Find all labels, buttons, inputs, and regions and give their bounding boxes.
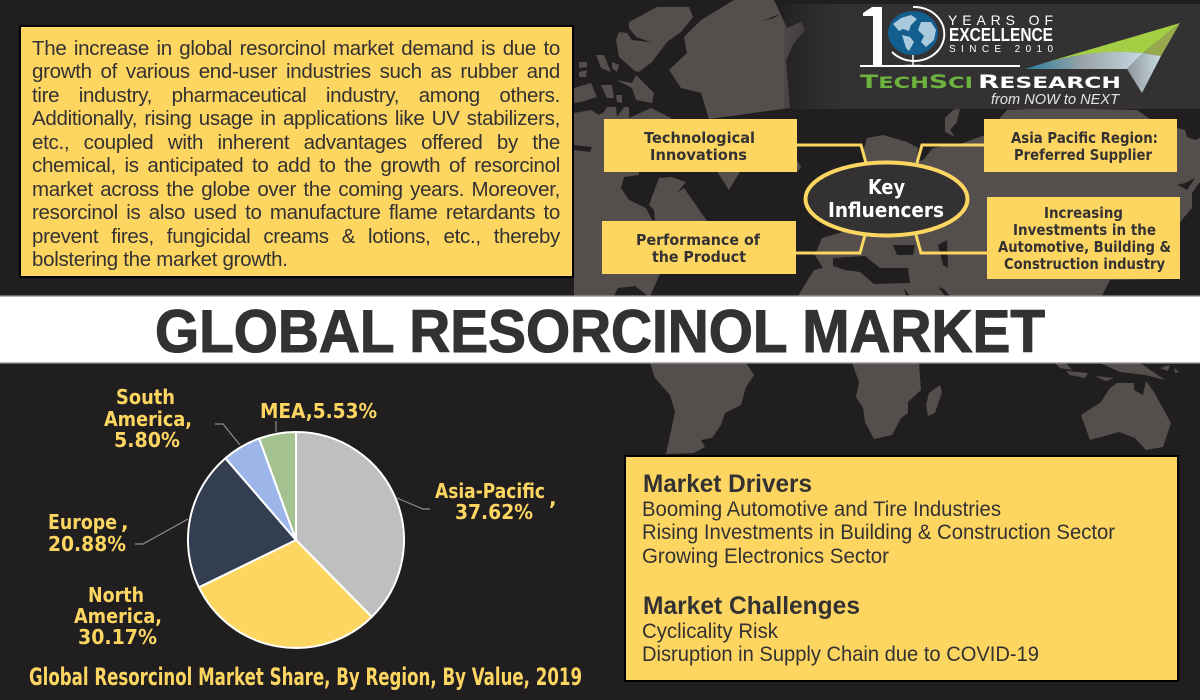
box: Increasing Investments: Investments in the xyxy=(1013,221,1156,239)
pie chart xyxy=(188,432,404,648)
market drivers list: Growing Electronics Sector xyxy=(642,545,889,568)
key influencers ellipse: Key xyxy=(868,175,905,199)
label: South America xyxy=(104,385,192,452)
panel: introduction text: market across the globe over the coming years. Moreover, xyxy=(32,178,560,200)
label: North America xyxy=(74,583,162,649)
box: Performance of the Product: the Product xyxy=(652,248,746,266)
panel: introduction text xyxy=(19,25,574,278)
box: Technological Innovations: Innovations xyxy=(650,146,747,164)
pie leader lines xyxy=(135,421,430,544)
slice: South America xyxy=(225,438,296,540)
heading: Market Challenges: Market Challenges xyxy=(643,592,860,620)
label: Asia-Pacific: Asia-Pacific xyxy=(435,479,545,503)
panel: introduction text: Additionally, rising usage in applications like UV stabilizers, xyxy=(32,107,560,130)
box: Technological Innovations xyxy=(604,119,797,172)
logo globe xyxy=(888,7,944,65)
label: Asia-Pacific: , xyxy=(549,486,557,510)
label: Europe xyxy=(48,510,129,556)
panel: introduction text: tire industry, pharmaceutical industry, among others. xyxy=(32,84,560,106)
logo: TechSci 10 years: EXCELLENCE xyxy=(949,25,1053,45)
label: Europe: , xyxy=(121,510,129,534)
world map background xyxy=(574,0,1200,454)
market drivers list xyxy=(642,498,1115,568)
panel: market drivers and challenges xyxy=(625,456,1178,681)
logo backdrop xyxy=(784,4,1200,109)
label: North America: America, xyxy=(74,604,162,628)
logo: TechSci 10 years: T ECH S CI xyxy=(860,71,973,93)
pie labels xyxy=(48,385,557,649)
logo: TechSci 10 years: YEARS OF xyxy=(948,12,1053,28)
label: South America: 5.80% xyxy=(114,428,180,452)
label: Asia-Pacific: 37.62% xyxy=(455,500,533,524)
label: North America: North xyxy=(88,583,144,607)
key influencers connectors xyxy=(796,145,987,253)
market drivers list: Rising Investments in Building & Construction Sector xyxy=(642,521,1115,544)
label: MEA: MEA,5.53% xyxy=(260,399,377,423)
logo: TechSci 10 years: SINCE 2010 xyxy=(949,44,1053,55)
label: South America: America, xyxy=(104,407,192,431)
box: Increasing Investments: Increasing xyxy=(1044,204,1123,222)
title band xyxy=(0,296,1200,365)
market challenges list: Cyclicality Risk xyxy=(642,620,778,643)
box: Increasing Investments: Construction industry xyxy=(1004,255,1165,273)
label: North America: 30.17% xyxy=(78,625,157,649)
panel: introduction text: bolstering the market growth. xyxy=(32,248,288,271)
label: Europe: 20.88% xyxy=(48,532,126,556)
market challenges list: Disruption in Supply Chain due to COVID-19 xyxy=(642,643,1039,666)
box: Performance of the Product xyxy=(602,221,796,274)
panel: introduction text: resorcinol is also used to manufacture flame retardants to xyxy=(32,201,560,224)
seas on the map xyxy=(574,14,1195,296)
box: Technological Innovations: Technological xyxy=(644,129,755,147)
label: Asia-Pacific xyxy=(435,479,557,524)
panel: introduction text: etc., coupled with inherent advantages offered by the xyxy=(32,130,560,154)
box: Asia Pacific Region xyxy=(984,119,1177,172)
slice: North America xyxy=(199,540,372,648)
logo: TechSci 10 years xyxy=(860,7,1180,108)
chart caption: Global Resorcinol Market Share, By Region, By Value, 2019 xyxy=(29,663,582,691)
box: Increasing Investments: Automotive, Building & xyxy=(998,238,1171,256)
slice: MEA xyxy=(259,432,296,540)
label: South America: South xyxy=(116,385,175,409)
box: Asia Pacific Region: Preferred Supplier xyxy=(1014,146,1153,164)
logo: TechSci 10 years: from NOW to NEXT xyxy=(991,91,1121,108)
market drivers list: Booming Automotive and Tire Industries xyxy=(642,498,1001,521)
panel: introduction text: prevent fires, fungicidal creams & lotions, etc., thereby xyxy=(32,224,560,248)
heading: Market Drivers: Market Drivers xyxy=(643,470,812,498)
logo: TechSci 10 years: R ESEARCH xyxy=(978,71,1121,93)
panel: introduction text: growth of various end-user industries such as rubber and xyxy=(32,60,560,83)
title: GLOBAL RESORCINOL MARKET xyxy=(155,298,1045,365)
slice: Europe xyxy=(188,458,296,587)
panel: introduction text: chemical, is anticipated to add to the growth of resorcinol xyxy=(32,154,560,177)
key influencers ellipse: Influencers xyxy=(828,198,944,222)
box: Increasing Investments xyxy=(987,197,1180,279)
box: Asia Pacific Region: Asia Pacific Region: xyxy=(1011,129,1158,147)
key influencers ellipse xyxy=(806,162,968,236)
panel: introduction text: The increase in global resorcinol market demand is due to xyxy=(32,36,560,60)
box: Performance of the Product: Performance of xyxy=(636,231,760,249)
logo numeral 1 xyxy=(863,7,882,67)
slice: Asia-Pacific xyxy=(296,432,404,617)
logo swoosh xyxy=(1025,23,1180,93)
label: Europe: Europe xyxy=(48,510,117,534)
market challenges list xyxy=(642,620,1039,666)
